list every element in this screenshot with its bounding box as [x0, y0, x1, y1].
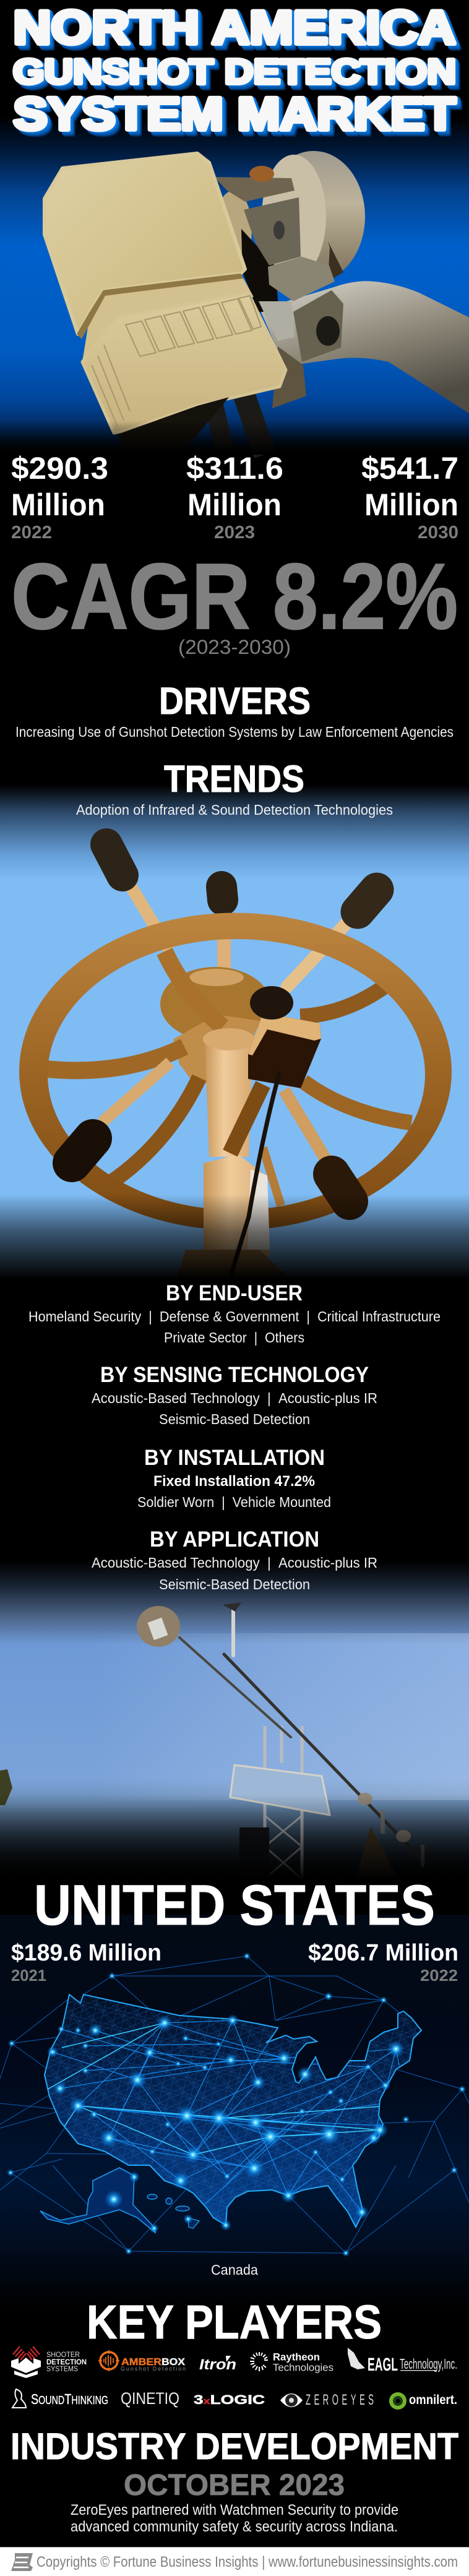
segment: by sensing technology: Seismic-Based Detection — [159, 1411, 310, 1427]
stat: US 2022: 2022 — [420, 1966, 458, 1985]
panel: United States network map — [0, 1915, 469, 2308]
hero panel: blue background with sensor photo — [0, 118, 469, 455]
stat: 2022 market size: 2022 — [11, 523, 52, 543]
icon: tree — [356, 1826, 398, 1879]
segment: by application: Seismic-Based Detection — [159, 1576, 310, 1592]
fade at bottom of hero — [0, 421, 469, 455]
logo: EAGL Technology: EAGL — [368, 2355, 398, 2375]
icon: hub — [160, 967, 270, 1089]
panel: sky with acoustic sensor wheel — [0, 785, 469, 1312]
icon: Fortune Business Insights logo — [11, 2553, 33, 2571]
segment: by installation: Soldier Worn | Vehicle Mounted — [137, 1494, 331, 1510]
segment: by installation: BY INSTALLATION — [144, 1446, 325, 1470]
logo: Amberbox: BOX — [161, 2357, 185, 2368]
stat: 2022 market size — [11, 451, 108, 543]
stat: 2030 market size: $541.7 — [361, 451, 458, 486]
icon: tree branch — [0, 1769, 12, 1805]
icon: booms — [179, 1607, 424, 1862]
icon: sensor cables — [213, 396, 265, 455]
icon: wheel spokes — [46, 951, 411, 1206]
icon: sensor housing cover — [45, 153, 245, 334]
icon: metal pipe — [260, 281, 469, 413]
logo: Shooter Detection Systems: SYSTEMS — [46, 2364, 78, 2373]
segment: by sensing technology — [92, 1363, 377, 1427]
stat: 2023 market size: $311.6 — [186, 451, 283, 486]
icon: round sensor cap — [262, 151, 365, 282]
logo: QinetiQ: QINETIQ — [121, 2389, 179, 2408]
stat: 2030 market size: Million — [364, 487, 458, 522]
segment: by application — [92, 1527, 377, 1592]
stat: US 2022 — [308, 1940, 458, 1985]
development text — [71, 2502, 398, 2535]
segment: by installation — [137, 1446, 331, 1510]
logo: Raytheon Technologies: Technologies — [273, 2362, 333, 2373]
segment: by application: BY APPLICATION — [150, 1527, 319, 1552]
logo: Raytheon Technologies: Raytheon — [273, 2351, 320, 2363]
segment: by end-user: BY END-USER — [166, 1281, 303, 1305]
logo: EAGL Technology — [348, 2348, 457, 2375]
trends text: Adoption of Infrared & Sound Detection Technologies — [76, 802, 393, 818]
title line 3: SYSTEM MARKET — [14, 88, 456, 140]
region label: Canada: Canada — [211, 2262, 258, 2278]
footer — [0, 2547, 469, 2576]
stat: US 2021: $189.6 Million — [11, 1940, 161, 1966]
stat: US 2021: 2021 — [11, 1966, 46, 1985]
fade at bottom of sky — [0, 1194, 469, 1312]
heading: key players: KEY PLAYERS — [87, 2296, 382, 2349]
stat: 2023 market size — [186, 451, 283, 543]
icon: mast — [167, 1028, 322, 1312]
logo: SoundThinking — [12, 2389, 108, 2408]
stat: US 2021 — [11, 1940, 161, 1985]
title line 2: GUNSHOT DETECTION — [13, 52, 456, 92]
logo: Amberbox — [98, 2350, 186, 2372]
segment: by sensing technology: BY SENSING TECHNOLOGY — [100, 1363, 369, 1387]
logo: Shooter Detection Systems: SHOOTER — [46, 2350, 80, 2359]
stat: US 2022: $206.7 Million — [308, 1940, 458, 1966]
heading: United States: UNITED STATES — [34, 1874, 435, 1937]
icon: sensor housing lower body — [77, 273, 286, 449]
chart: network nodes — [7, 1952, 466, 2257]
icon: tower lattice — [265, 1726, 302, 1881]
development text: ZeroEyes partnered with Watchmen Security to provide — [71, 2502, 398, 2518]
title — [13, 1, 456, 140]
icon: outer ring — [19, 913, 452, 1230]
logo: Amberbox: Gunshot Detection — [121, 2366, 186, 2372]
segment: by sensing technology: Acoustic-Based Technology | Acoustic-plus IR — [92, 1390, 377, 1406]
segment: by application: Acoustic-Based Technology | Acoustic-plus IR — [92, 1555, 377, 1571]
icon: sensor wheel — [19, 844, 452, 1312]
logo: SoundThinking: SOUNDTHINKING — [31, 2391, 108, 2407]
icon: small dishes — [358, 1793, 424, 1867]
panel: sky with sensor tower — [0, 1561, 469, 1881]
fade at bottom of tower sky — [0, 1794, 469, 1881]
logo: ZeroEyes: ZEROEYES — [306, 2392, 374, 2408]
heading: trends: TRENDS — [164, 758, 304, 800]
chart: network lines outside map — [0, 1956, 469, 2253]
icon: lower microphones — [72, 1138, 350, 1201]
icon: wind vane — [223, 1602, 241, 1612]
development text: advanced community safety & security across Indiana. — [71, 2518, 398, 2535]
stat: 2030 market size — [361, 451, 458, 543]
icon: sensor tower — [0, 1602, 424, 1881]
CAGR period: (2023-2030) — [178, 636, 291, 658]
stat: 2023 market size: 2023 — [214, 523, 255, 543]
logo: Amberbox: AMBER — [121, 2357, 161, 2368]
logo: Shooter Detection Systems — [11, 2346, 87, 2378]
map: contiguous United States — [44, 1993, 422, 2228]
development date: OCTOBER 2023 — [124, 2469, 345, 2502]
logo: 3xLogic: 3 xLOGIC — [194, 2393, 265, 2407]
segment: by end-user: Homeland Security | Defense & Government | Critical Infrastructure — [28, 1308, 441, 1324]
icon: clamp hardware — [214, 166, 343, 408]
map: Alaska outline — [40, 2168, 155, 2233]
stat: 2030 market size: 2030 — [418, 523, 458, 543]
icon: upper microphones — [106, 844, 377, 987]
logo: Omnilert: omnilert. — [409, 2393, 457, 2407]
segment: by end-user: Private Sector | Others — [164, 1329, 304, 1346]
segment: by end-user — [28, 1281, 441, 1346]
logo: Omnilert — [389, 2392, 457, 2410]
logo: Raytheon Technologies — [250, 2351, 333, 2373]
stat: 2022 market size: Million — [11, 487, 105, 522]
logo: Itron: Itron — [199, 2356, 236, 2373]
icon: solar panel — [230, 1765, 330, 1815]
segment: by installation: Fixed Installation 47.2% — [153, 1473, 315, 1490]
logo: Shooter Detection Systems: DETECTION — [46, 2358, 87, 2366]
icon: equipment box — [239, 1827, 269, 1881]
title line 1: NORTH AMERICA — [14, 1, 455, 54]
stat: 2023 market size: Million — [187, 487, 282, 522]
icon: bracket with cable — [230, 986, 321, 1277]
heading: drivers: DRIVERS — [159, 680, 311, 722]
stat: 2022 market size: $290.3 — [11, 451, 108, 486]
map: Hawaii islands — [147, 2194, 199, 2228]
icon: dish microphone — [137, 1606, 180, 1647]
